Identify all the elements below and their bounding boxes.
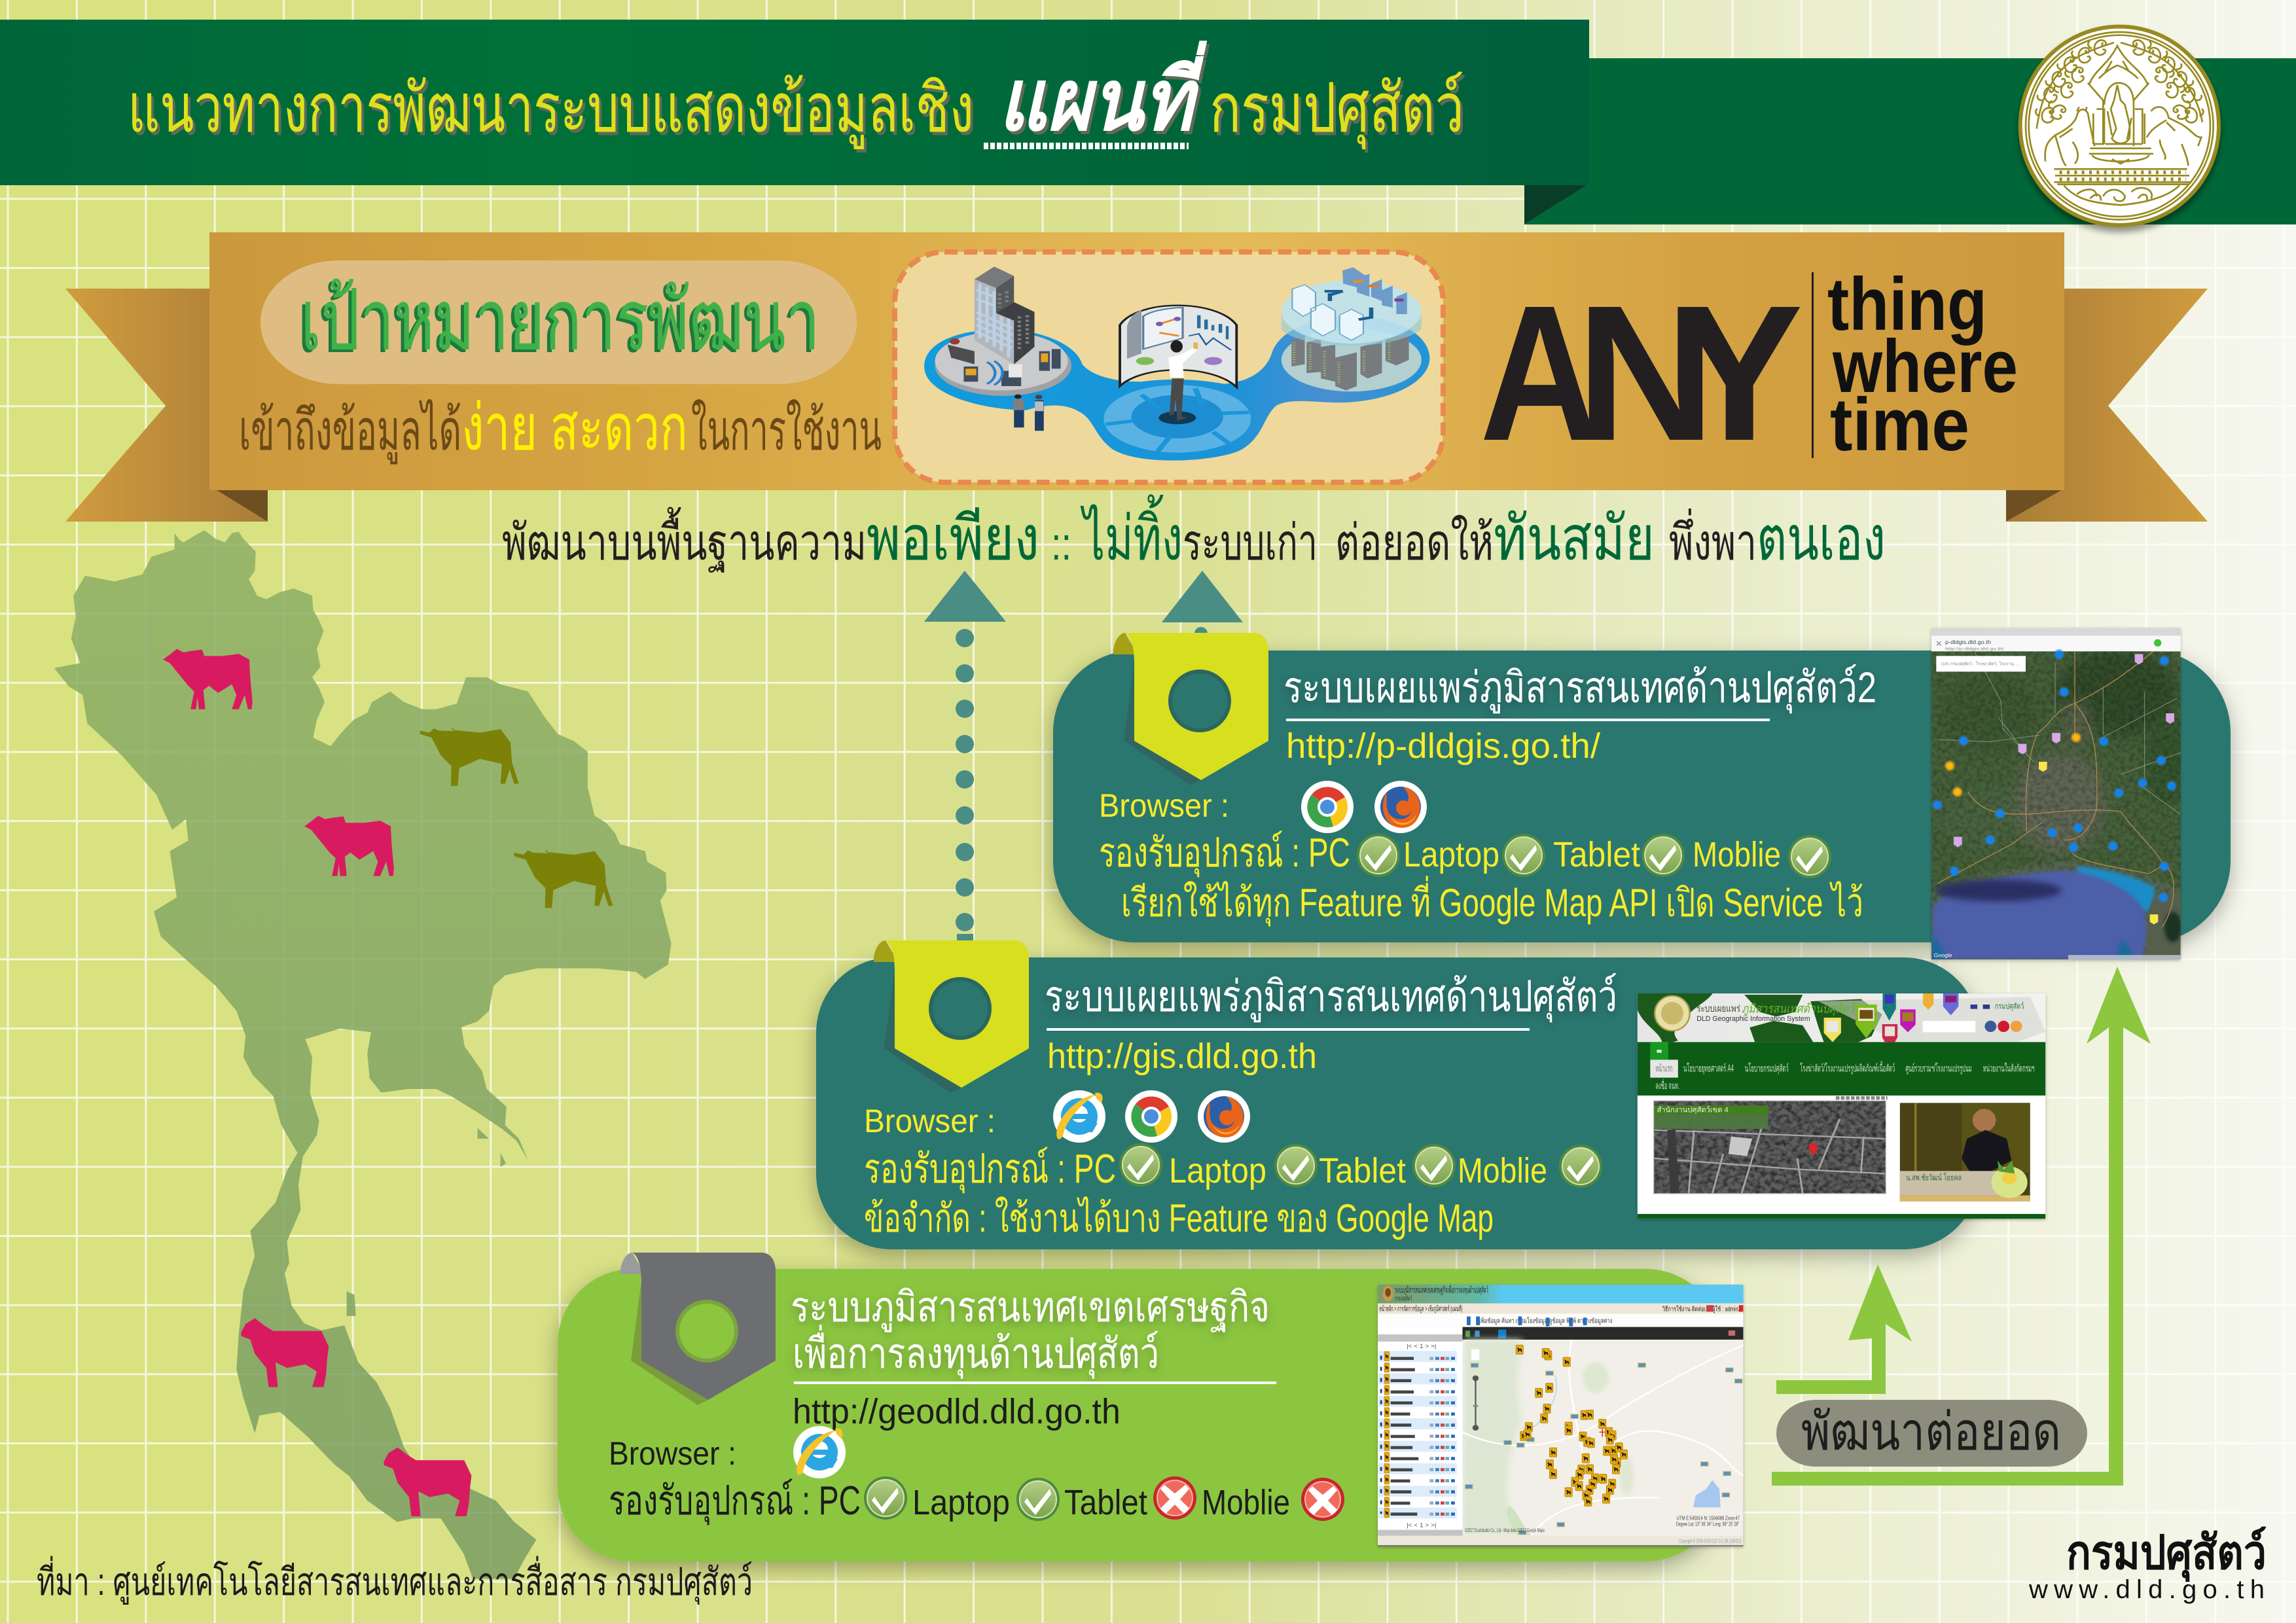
map application screenshot [1378, 1284, 1743, 1546]
building [975, 279, 1014, 365]
map application screenshot: ©2017 Ecartstudio Co., Ltd - Map data ©2017 Google Maps [1465, 1527, 1545, 1533]
cow: pink sheep far south [384, 1448, 471, 1516]
map terrain [1462, 1340, 1522, 1535]
website screenshot: DLD Geographic Information System [1696, 1014, 1810, 1023]
source note: ที่มา : ศูนย์เทคโนโลยีสารสนเทศและการสื่อสาร กรมปศุสัตว์ [37, 1556, 753, 1605]
principle line: ทันสมัย [1494, 504, 1655, 573]
principle line: ต่อยอดให้ [1335, 514, 1494, 571]
yellow clusters [1946, 734, 2080, 796]
icon: internet explorer [793, 1426, 846, 1478]
thing: thing [1827, 263, 1987, 346]
goal sentence: ง่าย สะดวก [461, 391, 688, 463]
goal sentence [239, 391, 882, 465]
panel title: ระบบเผยแพร่ภูมิสารสนเทศด้านปศุสัตว์ [1045, 972, 1617, 1023]
logo text: กรมปศุสัตว์ [2066, 1526, 2267, 1582]
device support row: Laptop [912, 1483, 1010, 1522]
cow: pink sheep south [241, 1318, 329, 1387]
black map toolbar [1462, 1327, 1743, 1340]
ribbon tag [1113, 633, 1268, 785]
seal scrollwork [2035, 104, 2057, 126]
url: http://geodld.dld.go.th [793, 1392, 1121, 1431]
principle line: :: [1051, 518, 1071, 569]
arrow: small green develop arrow [1776, 1264, 1912, 1394]
arrow: dotted up arrow left [924, 571, 1006, 942]
arrow: short up arrow right [1162, 571, 1243, 640]
portrait photo [1900, 1103, 2030, 1202]
map application screenshot: |< < 1 > >| [1407, 1522, 1437, 1529]
map application screenshot: กรมปศุสัตว์ [1395, 1294, 1412, 1303]
ANY wordmark: N [1576, 265, 1715, 481]
red crosshair [1600, 1428, 1609, 1437]
ribbon tag [874, 940, 1029, 1093]
principle line: ตนเอง [1757, 504, 1886, 573]
logo text [2028, 1526, 2267, 1604]
url: http://gis.dld.go.th [1047, 1037, 1317, 1076]
panel title: เพื่อการลงทุนด้านปศุสัตว์ [793, 1325, 1159, 1379]
zoom slider [1473, 1378, 1477, 1428]
nav band [1638, 1042, 2045, 1096]
device support row [864, 1143, 1602, 1193]
arrow: large green develop arrow [1772, 967, 2151, 1486]
goal heading: เป้าหมายการพัฒนา [300, 272, 820, 368]
man at screen [1170, 378, 1188, 421]
time: time [1830, 383, 1969, 467]
device support row: Tablet [1064, 1483, 1147, 1522]
glass data disc [1282, 280, 1422, 344]
center dial [1103, 385, 1251, 453]
website screenshot: นโยบายกรมปศุสัตว์ [1745, 1062, 1789, 1075]
two standing people [1014, 399, 1044, 431]
icon: internet explorer [1053, 1090, 1105, 1143]
cow: pink bull central [304, 815, 394, 876]
icon: firefox [1198, 1090, 1250, 1143]
map application screenshot: UTM E:545914 N: 1504089 Zone:47 [1677, 1515, 1740, 1522]
ANY wordmark: Y [1676, 265, 1803, 481]
map application screenshot: หน้าหลัก > การจัดการข้อมูล > เชิงภูมิศาสตร์ (แผนที่) [1379, 1304, 1463, 1313]
road shields [1465, 1363, 1742, 1535]
map application screenshot: วิธีการใช้งาน ติดต่อเรา ผู้ใช้ : admin2 [1662, 1305, 1741, 1313]
satellite map screenshot [1931, 628, 2193, 959]
title band [0, 20, 1589, 224]
sidebar list [1378, 1327, 1462, 1535]
blue clusters [1933, 651, 2176, 901]
note: เรียกใช้ได้ทุก Feature ที่ Google Map API เปิด Service ไว้ [1121, 876, 1863, 927]
device support row [1099, 830, 1831, 878]
goal ribbon [65, 232, 2208, 522]
goal sentence: ในการใช้งาน [691, 399, 882, 462]
dotted underline [984, 143, 1189, 149]
curved screen [1120, 306, 1236, 387]
website screenshot: สำนักงานปศุสัตว์เขต 4 [1657, 1105, 1729, 1115]
ANY wordmark: A [1480, 265, 1600, 481]
device support row: Laptop [1169, 1151, 1266, 1190]
device support row: รองรับอุปกรณ์ : PC [1099, 830, 1350, 877]
map application screenshot: ระบบภูมิสารสนเทศเขตเศรษฐกิจเพื่อการลงทุนด้านปศุสัตว์ [1395, 1284, 1488, 1295]
illustration: connected platforms [924, 266, 1429, 461]
cattle markers [1516, 1345, 1627, 1506]
title text part two: กรมปศุสัตว์ [1210, 71, 1464, 150]
animal pins [1824, 1018, 1841, 1042]
browser label: Browser : [864, 1103, 996, 1139]
right green band [1524, 58, 2296, 224]
map application screenshot: Degree Lat: 13° 36' 34" Long: 99° 25' 28" [1676, 1521, 1739, 1527]
cow: olive buffalo east [514, 849, 613, 908]
panel: system 3 [558, 1253, 1743, 1561]
device support row: Laptop [1403, 835, 1499, 874]
where: where [1832, 325, 2018, 408]
title text part one: แนวทางการพัฒนาระบบแสดงข้อมูลเชิง [128, 71, 974, 150]
purple markers [1954, 654, 2174, 847]
cow: olive buffalo northeast [420, 727, 519, 786]
satellite map screenshot: p-dldgis.dld.go.th [1945, 639, 1991, 645]
map application screenshot: เพิ่มข้อมูล ค้นหา เชื่อมโยงข้อมูล ดูข้อมูล พิมพ์ ตารางข้อมูลต่าง [1479, 1316, 1613, 1325]
panel: system 2 [1053, 628, 2231, 959]
website screenshot: หน่วยงานในสังกัดกรมฯ [1983, 1062, 2035, 1074]
website screenshot: น.สพ.ชัยวัฒน์ โยธคล [1906, 1173, 1962, 1182]
goal pill [260, 260, 857, 384]
device support row: Tablet [1319, 1151, 1406, 1190]
left disc [935, 335, 1071, 396]
website screenshot: ลงชื่อ จนท. [1655, 1079, 1679, 1092]
grey ribbon tag [620, 1253, 776, 1405]
principle line: พัฒนาบนพื้นฐานความ [502, 507, 867, 573]
divider [1812, 272, 1814, 458]
website screenshot: ระบบเผยแพร่ [1696, 1003, 1740, 1014]
website screenshot: กรมปศุสัตว์ [1995, 1002, 2024, 1011]
panel title: ระบบภูมิสารสนเทศเขตเศรษฐกิจ [791, 1283, 1270, 1332]
footer [1378, 1536, 1743, 1546]
map application screenshot: Copyright © 2009-2016 DLD 3.0.1f6 (190312) [1679, 1538, 1742, 1544]
yellow markers [2039, 762, 2158, 925]
aerial image [1653, 1100, 1886, 1194]
pill: continue development: พัฒนาต่อยอด [1801, 1402, 2061, 1461]
right disc [1282, 329, 1422, 391]
satellite map screenshot: Google [1934, 952, 1952, 958]
device support row: Moblie [1693, 835, 1781, 874]
website screenshot: นโยบายยุทธศาสตร์ A4 [1683, 1062, 1734, 1075]
illustration panel [895, 252, 1443, 482]
principle line: พอเพียง [867, 504, 1039, 573]
principle line: ระบบเก่า [1183, 515, 1318, 571]
cow: pink bull north [163, 649, 253, 709]
satellite map screenshot: http://p-dldgis.dld.go.th/ [1945, 647, 2004, 651]
panel title: ระบบเผยแพร่ภูมิสารสนเทศด้านปศุสัตว์2 [1283, 663, 1876, 714]
panel title [791, 1283, 1270, 1379]
server racks [1291, 334, 1409, 391]
device support row: Moblie [1458, 1151, 1547, 1190]
icon: chrome [1301, 781, 1354, 833]
satellite map screenshot: GIS กรมปศุสัตว์ : โรงฆ่าสัตว์, โรงงาน, ... [1941, 662, 2020, 667]
principle line: พึ่งพา [1669, 508, 1757, 571]
principle line [502, 494, 1886, 573]
map application screenshot: |< < 1 > >| [1407, 1343, 1437, 1350]
website screenshot [1638, 993, 2045, 1219]
website screenshot: โรงฆ่าสัตว์/โรงงานแปรรูปผลิตภัณฑ์เนื้อสัตว์ [1800, 1061, 1895, 1075]
principle line: ไม่ทิ้ง [1080, 494, 1183, 573]
device support row: Moblie [1202, 1483, 1290, 1522]
browser label: Browser : [1099, 787, 1229, 824]
office workers [948, 345, 975, 365]
website screenshot: ภูมิสารสนเทศด้านปศุสัตว์ [1742, 1001, 1856, 1016]
seal of the department [2018, 27, 2221, 232]
logo text: www.dld.go.th [2028, 1575, 2265, 1604]
device support row: Tablet [1553, 835, 1640, 874]
device support row: รองรับอุปกรณ์ : PC [864, 1147, 1116, 1193]
icon: firefox [1374, 781, 1427, 833]
website screenshot: หน้าแรก [1655, 1063, 1673, 1074]
browser label: Browser : [609, 1435, 736, 1472]
goal sentence: เข้าถึงข้อมูลได้ [239, 399, 461, 465]
icon: chrome [1125, 1090, 1177, 1143]
website screenshot: ศูนย์รวบรวมฯ/โรงงานแปรรูปนม [1905, 1062, 1972, 1075]
panel: system 1 [816, 940, 2045, 1249]
limitation note: ข้อจำกัด : ใช้งานได้บาง Feature ของ Google Map [864, 1196, 1494, 1240]
url: http://p-dldgis.go.th/ [1286, 726, 1600, 766]
title emphasised word: แผนที่ [998, 41, 1207, 148]
map of Thailand with livestock [54, 530, 672, 1578]
world map shapes [1638, 993, 1882, 1042]
device support row: รองรับอุปกรณ์ : PC [609, 1478, 861, 1525]
device support row [609, 1476, 1344, 1525]
ribbon tails [65, 289, 268, 522]
